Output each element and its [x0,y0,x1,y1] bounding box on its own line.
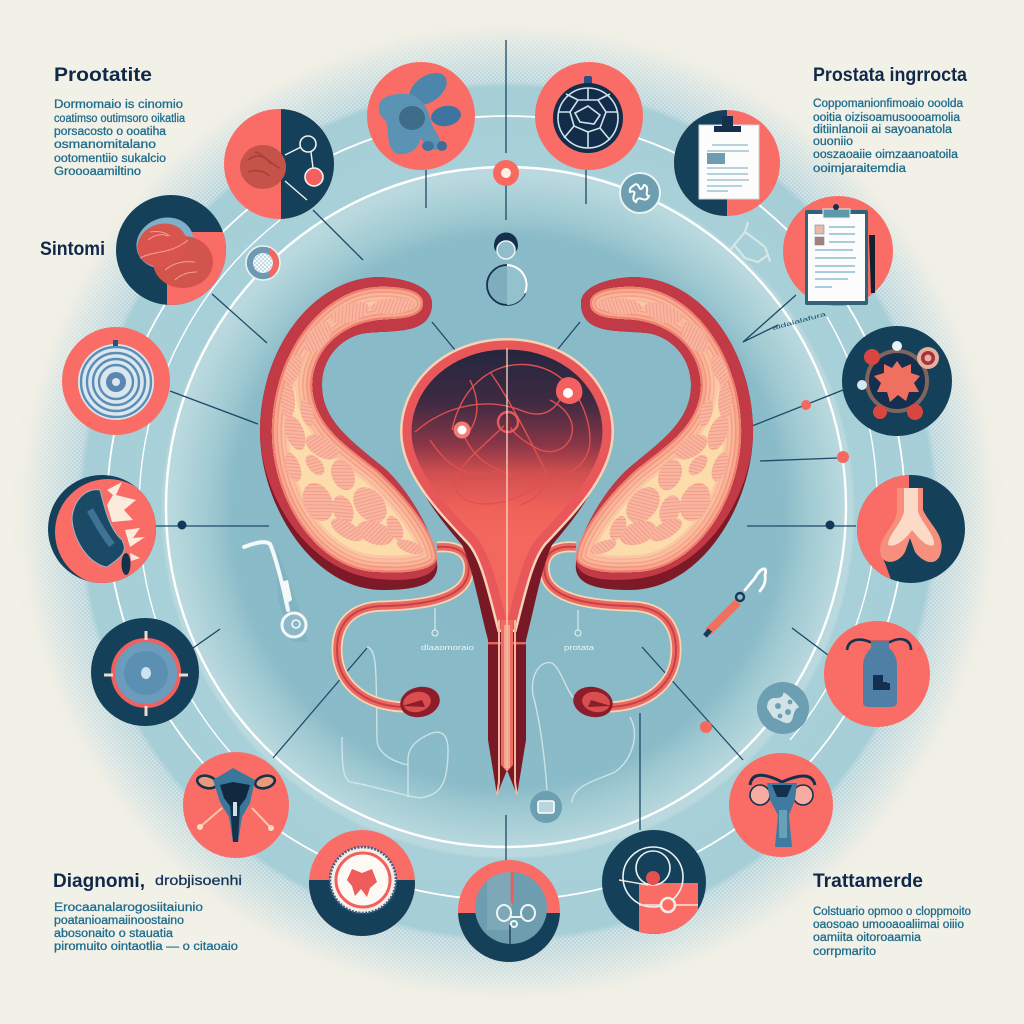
text block: Diagnomi: Erocaanalarogosiitaiunio [54,902,203,914]
small icon: cells lower right [757,682,809,734]
text block: Prostata ingrrocta: ditiinlanoii ai sayoanatola [813,124,953,136]
centre labels: dlaaomoraio [421,645,474,652]
icon 13: navy uterus [183,752,289,858]
icon 8: red cell cluster [842,326,952,436]
concentric white rings [107,116,905,900]
text block: Prostata ingrrocta: ooszaoaiie oimzaanoatoila [813,149,959,161]
text block: Trattamerde: Trattamerde [813,871,923,892]
small icon: cells top left [246,246,280,280]
icon 7: concentric rings [62,327,170,435]
icon 4: report clipboard [674,110,780,216]
anatomy: right duct [544,547,676,721]
heading: Sintomi: Sintomi [40,239,105,260]
icon 10: pink tube shape [857,475,965,583]
connector lines [155,40,856,860]
icon 2: mesh sphere [535,62,643,170]
top centre node [493,160,519,186]
text block: Prostata ingrrocta: ooitia oizisoamusoooamolia [813,112,961,124]
small icon: screen [530,791,562,823]
anatomy: left lobe [260,277,437,590]
centre labels: aidaialafura [772,312,828,332]
text block: Prootatite [54,65,186,178]
text block: Prootatite: Groooaamiltino [54,166,141,178]
faint anatomical outlines [342,647,634,803]
icon 14: pink uterus [729,753,833,857]
icon 5: red gland on navy [116,195,230,310]
icon 9: pain organ [48,475,161,585]
text block: Trattamerde: Colstuario opmoo o cloppmoito [813,906,971,918]
icon 11: target lens [91,618,199,726]
text block: Diagnomi [53,871,242,953]
text block: Prootatite: coatimso outimsoro oikatlia [54,113,186,125]
icon 16: section diagram [458,860,560,962]
top keyhole glyph [487,232,527,305]
text block: Trattamerde: corrpmarito [813,946,876,958]
small icon: instrument [244,542,308,642]
text block: Trattamerde: oaosoao umooaoaliimai oiiio [813,919,964,931]
text block: Prootatite: Dormomaio is cinomio [54,99,183,111]
centre labels [421,312,828,652]
text block: Prootatite: Prootatite [54,65,152,86]
icon 17: folder with rings [602,830,706,940]
text block: Diagnomi: drobjisoenhi [155,872,242,888]
text block: Diagnomi: abosonaito o stauatia [54,928,174,940]
text block: Prostata ingrrocta: ooimjaraitemdia [813,163,907,175]
small icon: cells top right [620,173,660,213]
anatomy: right lobe [576,277,753,590]
icon 6: clipboard with pen [783,196,893,306]
icon 12: bottle [824,621,930,727]
text block: Trattamerde [813,871,971,958]
text block: Diagnomi: poatanioamaiinoostaino [54,915,184,927]
text block: Prootatite: porsacosto o ooatiha [54,126,167,138]
text block: Prostata ingrrocta: ouoniio [813,136,853,148]
text block: Diagnomi: Diagnomi, [53,871,145,892]
text block: Prootatite: osmanomitalano [54,139,156,151]
centre labels: protata [564,645,594,652]
text block: Prostata ingrrocta: Prostata ingrrocta [813,65,967,86]
small icon: pen [705,569,766,636]
text block: Prostata ingrrocta: Coppomanionfimoaio ooolda [813,98,964,110]
text block: Diagnomi: piromuito ointaotlia — o citaoaio [54,941,238,953]
text block: Trattamerde: oamiita oitoroaamia [813,932,922,944]
icon 15: petri dish [309,830,415,936]
icon 3: gland with nodes [224,109,334,219]
small icon: faint molecule [730,222,770,262]
icon 1: blue organ [367,62,475,170]
anatomy: central bladder and urethra [407,345,607,795]
connector nodes [178,400,849,733]
text block: Prootatite: ootomentiio sukalcio [54,153,166,165]
text block: Prostata ingrrocta [813,65,967,175]
anatomy: left duct [337,547,469,721]
